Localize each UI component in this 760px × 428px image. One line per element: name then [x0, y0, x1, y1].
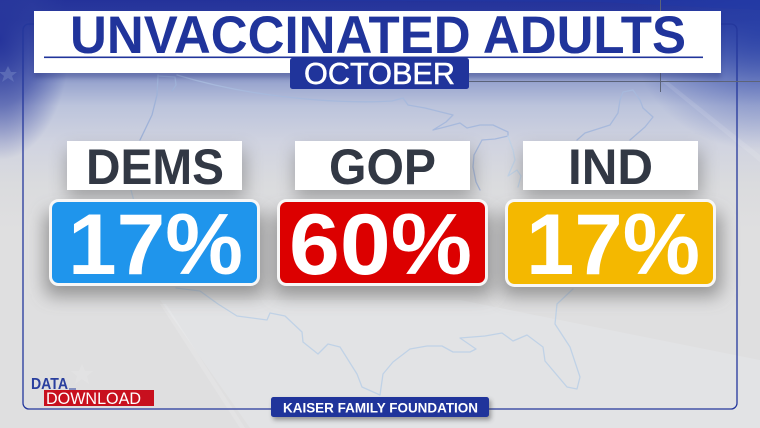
title: UNVACCINATED ADULTS — [70, 6, 686, 65]
crosshair lines — [469, 0, 760, 92]
month label: OCTOBER — [304, 57, 455, 91]
logo: Data Download: DATA — [31, 376, 68, 393]
IND label: IND — [568, 139, 653, 195]
source label — [271, 397, 491, 420]
source label: KAISER FAMILY FOUNDATION — [283, 400, 478, 416]
DEMS value: 17% — [68, 197, 243, 293]
IND value: 17% — [526, 197, 700, 293]
IND label — [523, 139, 698, 195]
GOP label — [295, 139, 470, 195]
DEMS label: DEMS — [86, 139, 224, 195]
GOP value: 60% — [289, 197, 472, 293]
map of the United States outline — [131, 75, 653, 395]
panel: IND — [501, 139, 721, 296]
GOP label: GOP — [329, 139, 436, 195]
logo: Data Download: DOWNLOAD — [46, 390, 141, 408]
panel: DEMS — [45, 139, 265, 296]
title banner — [34, 6, 721, 78]
logo: Data Download — [31, 376, 154, 408]
panel: GOP — [273, 139, 493, 296]
